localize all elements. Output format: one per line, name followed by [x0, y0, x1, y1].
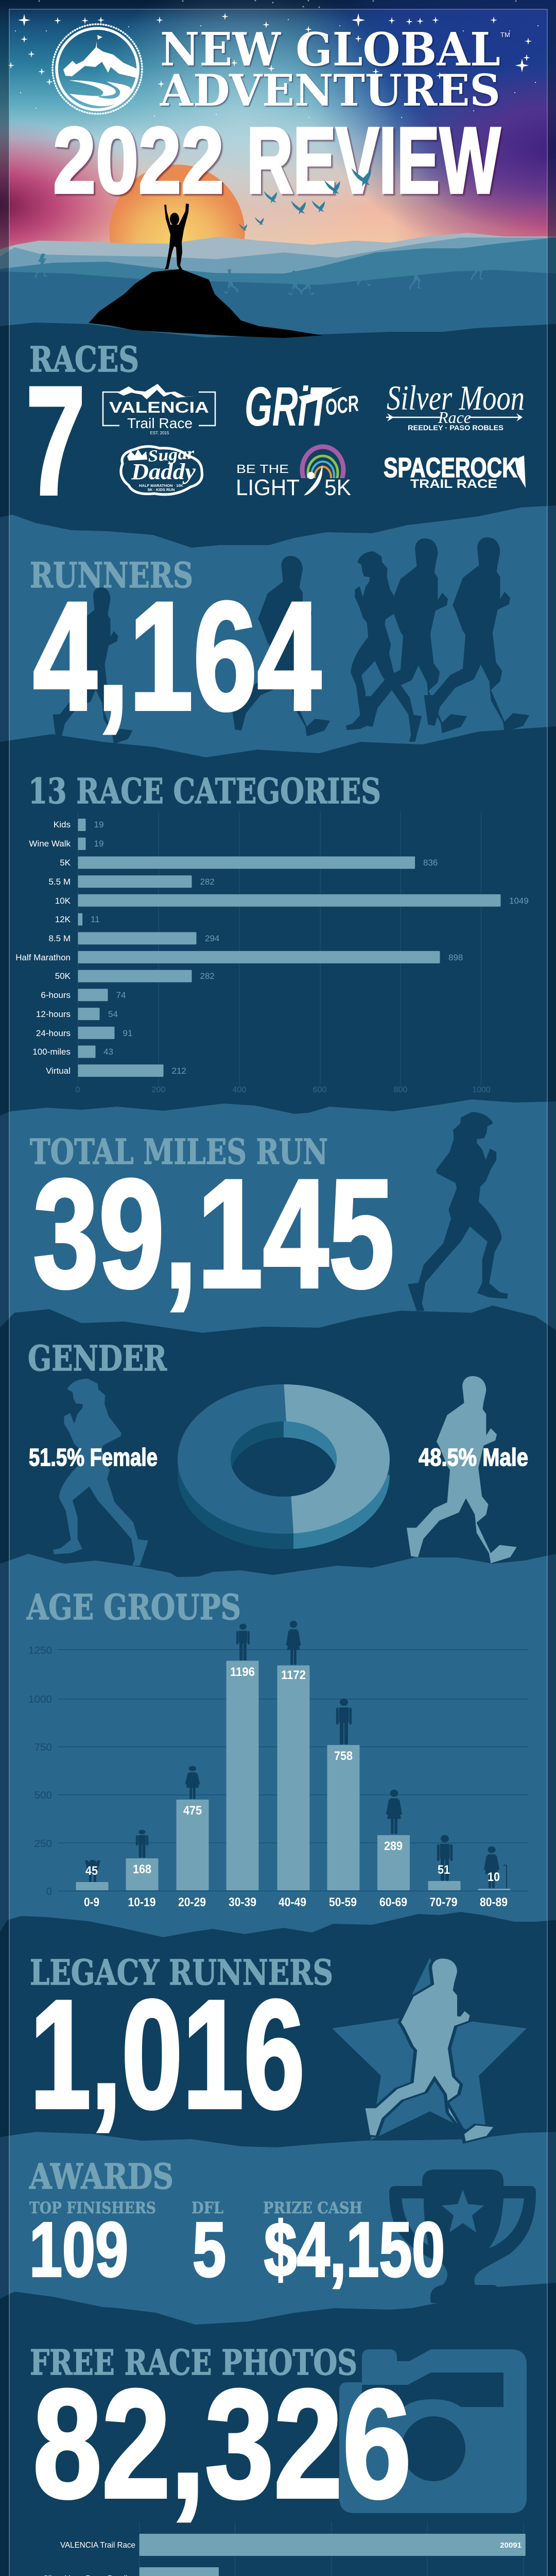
bar chart: age groups: 1172	[281, 1668, 306, 1682]
panel: races	[26, 339, 526, 527]
icon: female runner silhouette	[408, 1112, 508, 1311]
number: dfl: 5	[193, 2206, 226, 2293]
bar chart: age groups: 475	[183, 1804, 202, 1818]
logo: mountain emblem	[53, 24, 142, 114]
heading: legacy runners: LEGACY RUNNERS	[30, 1952, 333, 1993]
bar chart: age groups: 1000	[28, 1693, 52, 1705]
number: 7 races: 7	[26, 354, 85, 527]
bar chart: race categories: 836	[423, 858, 438, 868]
bar chart: age groups: 60-69	[379, 1895, 407, 1909]
bar chart: race categories: 0	[76, 1086, 80, 1094]
title: 2022 review	[53, 108, 500, 213]
donut chart: gender split	[178, 1384, 391, 1551]
bar chart: age groups: 500	[34, 1789, 52, 1801]
logo: sugar daddy: 5K · KIDS RUN	[148, 487, 175, 492]
bar chart: race categories: 200	[152, 1086, 165, 1094]
logo: valencia trail race: VALENCIA	[109, 398, 209, 416]
panel: awards	[29, 2156, 536, 2303]
logo: sugar daddy	[121, 444, 202, 495]
panel: race categories	[15, 771, 529, 1094]
number: prize cash: $4,150	[264, 2206, 445, 2293]
number: runners total: 4,164	[33, 569, 322, 742]
small runners on hills	[34, 253, 483, 295]
icon: male runner	[407, 1376, 517, 1563]
logo: sugar daddy: HALF MARATHON · 10K	[139, 483, 183, 488]
bar chart: age groups: 51	[438, 1863, 450, 1877]
bar chart: age groups: 168	[133, 1862, 151, 1876]
bar chart: race categories: 1000	[472, 1086, 491, 1094]
hero: summit rock and figure	[89, 204, 323, 338]
title: brand name: NEW GLOBAL	[160, 22, 500, 76]
birds	[239, 168, 371, 231]
runner silhouettes group	[53, 537, 529, 744]
bar chart: age groups: 10	[488, 1870, 500, 1884]
bar chart: age groups	[28, 1621, 528, 1909]
bar chart: race categories: 282	[200, 877, 215, 887]
logo: silver moon race: REEDLEY · PASO ROBLES	[408, 423, 503, 432]
title: brand name: TM	[500, 31, 510, 39]
bar chart: race categories: 294	[205, 934, 219, 943]
bar chart: race categories: Virtual	[46, 1066, 71, 1076]
icon: camera	[339, 2349, 527, 2513]
logo: silver moon race: Silver Moon	[387, 378, 525, 417]
bar chart: race categories: 12-hours	[36, 1009, 71, 1019]
bar chart: race categories: 8.5 M	[48, 934, 71, 943]
bar chart: race categories: 74	[116, 990, 126, 1000]
bar chart: race categories: 212	[172, 1066, 186, 1076]
bar chart: age groups: 758	[334, 1749, 353, 1763]
heading: runners: RUNNERS	[30, 555, 193, 596]
label: top finishers: TOP FINISHERS	[29, 2199, 156, 2217]
logo: valencia trail race: EST. 2015	[150, 431, 169, 435]
logo: be the light 5k	[236, 447, 351, 500]
heading: gender: GENDER	[28, 1338, 167, 1379]
logo: valencia trail race: Trail Race	[127, 415, 193, 431]
bar chart: race categories: 91	[123, 1028, 132, 1038]
bar chart: age groups: 30-39	[229, 1895, 256, 1909]
bar chart: photos per race	[28, 2522, 535, 2576]
logo: spacerock trail race: SPACEROCK	[384, 452, 517, 483]
bar chart: age groups: 0-9	[84, 1895, 99, 1909]
icon: female runner	[53, 1379, 148, 1566]
panel: age groups	[26, 1587, 528, 1909]
number: free race photos: 82,326	[33, 2357, 411, 2530]
title: brand name: ADVENTURES	[160, 65, 500, 116]
bar chart: race categories: Wine Walk	[29, 839, 71, 849]
bar chart: race categories: 100-miles	[32, 1047, 71, 1057]
bar chart: age groups: 40-49	[279, 1895, 306, 1909]
bar chart: race categories: 10K	[55, 896, 71, 906]
bar chart: race categories: 50K	[55, 971, 71, 981]
icon: star	[332, 1958, 527, 2140]
number: legacy runners: 1,016	[30, 1968, 305, 2141]
icon: runner on star	[363, 1958, 495, 2143]
bar chart: race categories: 54	[108, 1009, 118, 1019]
panel: runners	[30, 537, 529, 744]
bar chart: race categories: 898	[448, 953, 463, 962]
logo: silver moon race: Race	[438, 408, 471, 427]
bar chart: race categories: 24-hours	[36, 1028, 71, 1038]
bar chart: race categories: 5.5 M	[48, 877, 71, 887]
icons: age group people	[85, 1621, 507, 1888]
bar chart: race categories	[15, 811, 529, 1094]
panel: total miles run	[30, 1112, 508, 1320]
bar chart: age groups: 289	[384, 1839, 403, 1853]
logo: spacerock trail race: TRAIL RACE	[410, 477, 497, 491]
bar chart: race categories: 800	[394, 1086, 407, 1094]
bar chart: age groups: 10-19	[128, 1895, 155, 1909]
bar chart: race categories: 1049	[509, 896, 529, 906]
sky gradient	[0, 0, 556, 345]
title: brand name	[160, 22, 510, 116]
icon: trophy	[389, 2170, 536, 2303]
bar chart: race categories: 600	[313, 1086, 326, 1094]
bar chart: race categories: 400	[233, 1086, 246, 1094]
heading: total miles run: TOTAL MILES RUN	[30, 1131, 328, 1172]
logo: spacerock trail race	[384, 452, 526, 491]
label: female share: 51.5% Female	[29, 1444, 158, 1471]
bar chart: race categories: 12K	[55, 914, 71, 924]
bar chart: race categories: 19	[94, 839, 103, 849]
bar chart: age groups: 80-89	[480, 1895, 508, 1909]
bar chart: race categories: Half Marathon	[15, 953, 71, 962]
bar chart: age groups: 70-79	[429, 1895, 457, 1909]
label: prize cash: PRIZE CASH	[263, 2199, 362, 2217]
logo: be the light 5k: BE THE	[236, 462, 289, 476]
logo: sugar daddy: Daddy	[131, 459, 196, 484]
bar chart: race categories: Kids	[54, 820, 71, 829]
heading: free race photos: FREE RACE PHOTOS	[30, 2342, 357, 2383]
logo: valencia trail race	[103, 384, 215, 435]
number: top finishers: 109	[29, 2206, 128, 2293]
bar chart: race categories: 282	[200, 971, 215, 981]
heading: awards: AWARDS	[29, 2156, 173, 2197]
heading: 13 race categories: 13 RACE CATEGORIES	[28, 771, 381, 811]
bar chart: race categories: 6-hours	[41, 990, 71, 1000]
stars	[7, 0, 538, 118]
bar chart: race categories: 5K	[60, 858, 71, 868]
bar chart: age groups: 1196	[230, 1665, 255, 1679]
logo: grit ocr: OCR	[324, 391, 360, 420]
number: total miles: 39,145	[33, 1147, 394, 1320]
bar chart: race categories: 11	[91, 914, 100, 924]
heading: age groups: AGE GROUPS	[26, 1587, 241, 1628]
logo: sugar daddy: Sugar	[147, 444, 195, 465]
bar chart: age groups: 750	[34, 1741, 52, 1753]
bar chart: photos per race: 20091	[500, 2541, 522, 2550]
panel: legacy runners	[30, 1952, 527, 2143]
logo: be the light 5k: 5K	[324, 475, 351, 500]
bar chart: race categories: 43	[103, 1047, 113, 1057]
bar chart: age groups: 20-29	[178, 1895, 206, 1909]
title: 2022 review: 2022	[53, 108, 224, 213]
logo: grit ocr: GRiT	[245, 375, 332, 437]
mountain layers	[0, 233, 556, 345]
heading: races: RACES	[29, 339, 139, 380]
hero: sunset sky with mountains	[0, 0, 556, 345]
bar chart: age groups: 50-59	[329, 1895, 357, 1909]
panel: free race photos	[28, 2342, 535, 2576]
label: male share: 48.5% Male	[419, 1444, 528, 1471]
bar chart: age groups: 45	[85, 1864, 98, 1878]
sun	[109, 165, 245, 300]
bar chart: race categories: 19	[94, 820, 103, 829]
bar chart: age groups: 1250	[28, 1645, 52, 1656]
panel: gender	[28, 1338, 528, 1566]
label: dfl: DFL	[192, 2199, 223, 2217]
logo: be the light 5k: LIGHT	[236, 475, 300, 500]
bar chart: photos per race: VALENCIA Trail Race	[60, 2541, 135, 2550]
logo: silver moon race	[386, 378, 525, 432]
bar chart: age groups: 0	[46, 1886, 52, 1897]
bar chart: age groups: 250	[34, 1838, 52, 1850]
